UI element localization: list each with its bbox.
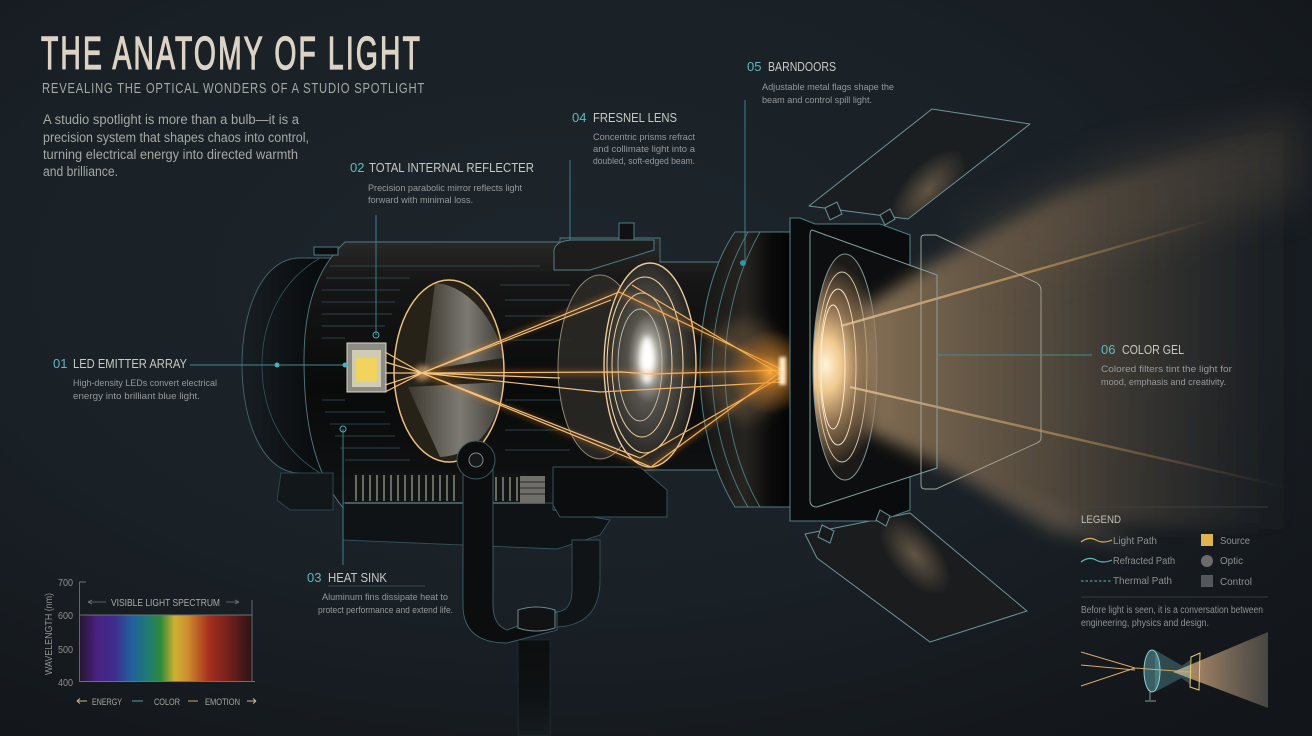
source key bbox=[1201, 534, 1250, 547]
caption arrows bbox=[77, 698, 256, 704]
frame bbox=[790, 218, 910, 521]
intro text: turning electrical energy into directed warmth bbox=[43, 147, 298, 162]
intro text: and brilliance. bbox=[43, 164, 118, 179]
left arm bbox=[463, 462, 557, 643]
callout 03: heat sink: HEAT SINK bbox=[328, 570, 387, 585]
intro text: precision system that shapes chaos into control, bbox=[43, 130, 309, 145]
legend: LEGEND bbox=[1081, 514, 1121, 526]
axis labels: WAVELENGTH (nm) bbox=[44, 593, 55, 675]
stand pole bbox=[518, 640, 550, 736]
callout 02: total internal reflector: forward with minimal loss. bbox=[368, 195, 473, 206]
caption row bbox=[92, 697, 240, 708]
intro text: A studio spotlight is more than a bulb—it is a bbox=[43, 112, 299, 127]
refracted path key bbox=[1081, 556, 1175, 567]
callout 02: total internal reflector: TOTAL INTERNAL REFLECTER bbox=[369, 160, 534, 175]
callout 01: LED emitter array: LED EMITTER ARRAY bbox=[73, 357, 188, 371]
thermal path key bbox=[1081, 576, 1172, 587]
optic key: Optic bbox=[1220, 556, 1243, 567]
mid housing and knob bbox=[554, 240, 654, 270]
source key: Source bbox=[1220, 536, 1250, 547]
callout 02: total internal reflector bbox=[350, 160, 534, 206]
reflector bbox=[394, 280, 504, 462]
subtitle: REVEALING THE OPTICAL WONDERS OF A STUDIO SPOTLIGHT bbox=[42, 81, 425, 97]
color gel panel bbox=[921, 235, 1041, 489]
callout 03: heat sink bbox=[307, 570, 453, 616]
callout 06: color gel: 06 bbox=[1101, 342, 1115, 357]
callout 04: fresnel lens: FRESNEL LENS bbox=[593, 110, 677, 125]
callout 04: fresnel lens: and collimate light into a bbox=[593, 144, 696, 155]
light rays bbox=[385, 285, 812, 467]
main body bbox=[304, 238, 720, 510]
hub bbox=[518, 607, 555, 631]
legend note: Before light is seen, it is a conversation between bbox=[1081, 605, 1263, 616]
side flap outline bbox=[810, 230, 937, 507]
callout 03: heat sink: protect performance and extend life. bbox=[318, 605, 453, 616]
callout 02: total internal reflector: Precision parabolic mirror reflects light bbox=[368, 183, 522, 194]
door clips bbox=[818, 202, 895, 543]
side flap base bbox=[810, 230, 937, 507]
LED emitter bbox=[347, 343, 386, 392]
callout 01: LED emitter array: energy into brilliant blue light. bbox=[73, 391, 200, 402]
axes bbox=[80, 582, 255, 682]
top barn door bbox=[808, 108, 1030, 220]
callout 05: barndoors: beam and control spill light. bbox=[762, 95, 872, 106]
outer lens flange bbox=[558, 275, 642, 459]
intro text bbox=[43, 112, 309, 179]
callout 03: heat sink: Aluminum fins dissipate heat to bbox=[322, 592, 448, 603]
title: THE ANATOMY OF LIGHT bbox=[41, 27, 422, 79]
thermal path key: Thermal Path bbox=[1113, 576, 1172, 587]
callout 06: color gel: COLOR GEL bbox=[1122, 342, 1184, 357]
lower housing bbox=[343, 503, 610, 549]
axis labels: 600 bbox=[58, 611, 73, 622]
callout 06: color gel: mood, emphasis and creativity. bbox=[1101, 377, 1226, 388]
heat sink fins bbox=[345, 473, 545, 503]
optic key bbox=[1201, 555, 1243, 567]
callout 01: LED emitter array bbox=[53, 356, 217, 402]
cooling fins outline bbox=[322, 266, 570, 460]
bottom barn door bbox=[805, 503, 1027, 642]
caption row: ENERGY bbox=[92, 697, 122, 708]
caption row: EMOTION bbox=[205, 697, 240, 708]
fresnel lens bbox=[604, 263, 696, 467]
back cap bbox=[242, 258, 345, 473]
callout 04: fresnel lens: 04 bbox=[572, 110, 586, 125]
spectrum chart bbox=[44, 578, 256, 708]
lower left foot bbox=[277, 473, 333, 510]
legend bbox=[1081, 507, 1268, 708]
callout 01: LED emitter array: 01 bbox=[53, 356, 67, 371]
mounting bracket top bbox=[314, 247, 338, 255]
callout 05: barndoors: 05 bbox=[747, 59, 761, 74]
mini optical diagram bbox=[1081, 632, 1268, 708]
callout 04: fresnel lens bbox=[572, 110, 696, 167]
control key bbox=[1201, 575, 1252, 588]
axis labels: 700 bbox=[58, 578, 73, 589]
barndoors bbox=[790, 109, 1030, 642]
axis labels: 500 bbox=[58, 645, 73, 656]
axis labels bbox=[44, 578, 73, 689]
callout 03: heat sink: 03 bbox=[307, 570, 321, 585]
leader lines bbox=[190, 100, 1092, 565]
pivot bbox=[457, 441, 495, 479]
callout 04: fresnel lens: Concentric prisms refract bbox=[593, 132, 695, 143]
callout 05: barndoors: Adjustable metal flags shape the bbox=[762, 82, 894, 93]
caption row: COLOR bbox=[154, 697, 180, 708]
callout 06: color gel bbox=[1101, 342, 1232, 388]
legend note bbox=[1081, 605, 1263, 629]
chart title: VISIBLE LIGHT SPECTRUM bbox=[111, 598, 220, 609]
lens opening bbox=[813, 254, 877, 480]
callout 05: barndoors: BARNDOORS bbox=[768, 59, 836, 74]
spectrum arrows bbox=[88, 600, 239, 604]
yoke and stand bbox=[457, 441, 600, 736]
refracted path key: Refracted Path bbox=[1113, 556, 1175, 567]
callout 01: LED emitter array: High-density LEDs convert electrical bbox=[73, 378, 217, 389]
right arm bbox=[555, 540, 600, 627]
light path key: Light Path bbox=[1113, 536, 1157, 547]
callout 04: fresnel lens: doubled, soft-edged beam. bbox=[593, 156, 695, 167]
spotlight housing bbox=[242, 223, 812, 549]
callout 05: barndoors bbox=[747, 59, 894, 106]
callout 06: color gel: Colored filters tint the light for bbox=[1101, 364, 1232, 375]
control key: Control bbox=[1220, 577, 1252, 588]
light beam bbox=[841, 110, 1310, 550]
callout 02: total internal reflector: 02 bbox=[350, 160, 364, 175]
light path key bbox=[1081, 536, 1157, 547]
spectrum band bbox=[80, 615, 252, 681]
front collar bbox=[700, 232, 790, 507]
legend note: engineering, physics and design. bbox=[1081, 618, 1209, 629]
axis labels: 400 bbox=[58, 678, 73, 689]
